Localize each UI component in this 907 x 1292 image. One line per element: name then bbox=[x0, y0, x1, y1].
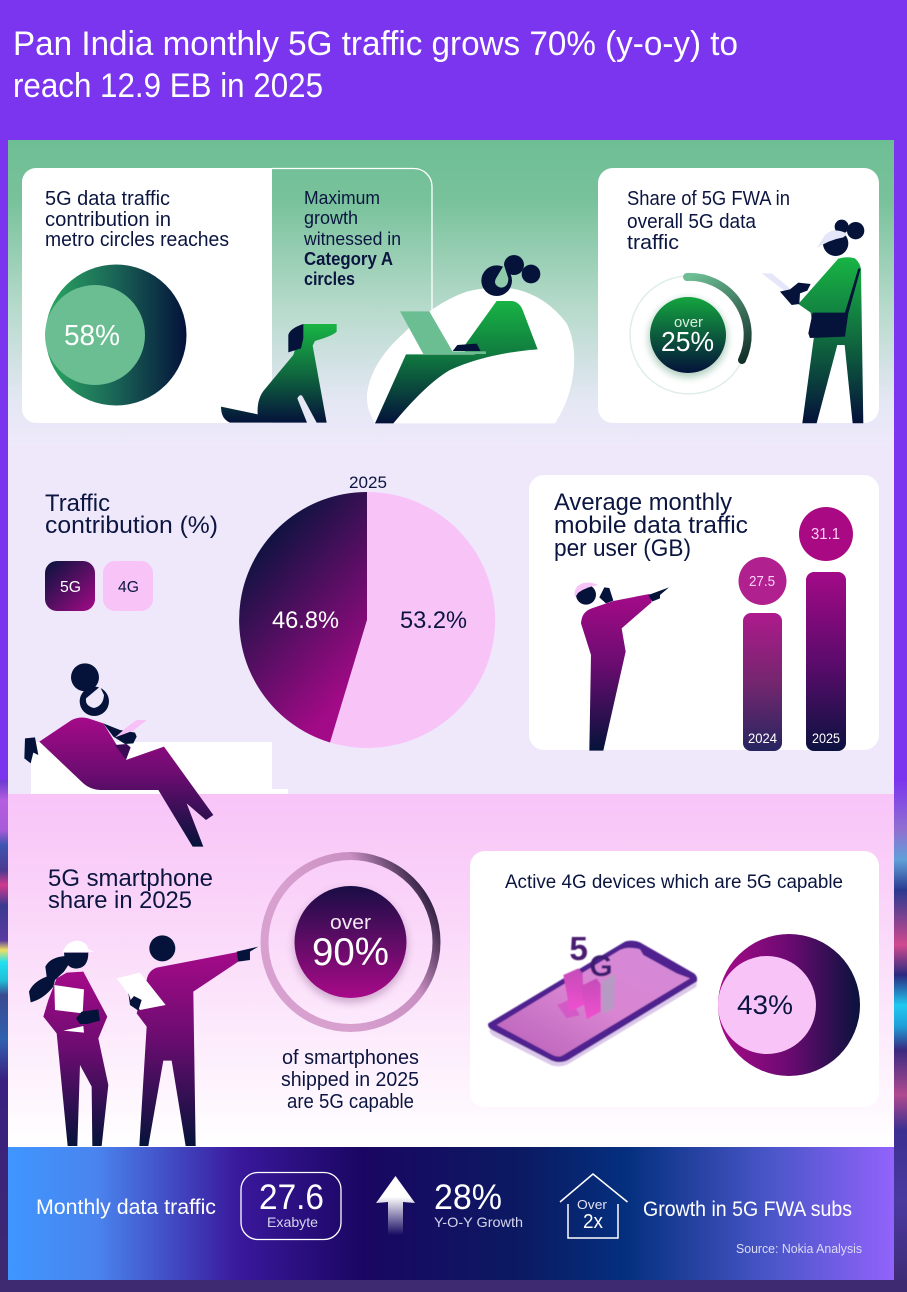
ring gauge: over 90 percent: over bbox=[330, 912, 371, 934]
illustration: man pointing bbox=[575, 583, 669, 751]
monthly data heading: per user (GB) bbox=[554, 535, 691, 562]
heading: 5G smartphone share: 5G smartphone bbox=[48, 865, 213, 892]
FWA heading bbox=[627, 188, 790, 254]
bar chart: GB per user: 2024 bbox=[748, 730, 777, 746]
donut 43 percent: 43% bbox=[737, 990, 793, 1020]
metro heading bbox=[45, 188, 229, 251]
category A note: witnessed in bbox=[303, 228, 401, 249]
illustration: person on bean bag with laptop bbox=[367, 255, 574, 423]
growth stat bbox=[434, 1178, 523, 1230]
card outline bbox=[272, 168, 432, 312]
illustration: dog bbox=[221, 324, 337, 423]
right colourful edge bbox=[894, 780, 907, 1292]
category A note bbox=[303, 187, 401, 289]
illustration: woman with tablet bbox=[762, 220, 864, 423]
source: Source: Nokia Analysis bbox=[736, 1241, 862, 1256]
panel: average monthly data card bbox=[529, 475, 879, 751]
legend: 4G bbox=[103, 561, 153, 611]
FWA heading: Share of 5G FWA in bbox=[627, 188, 790, 210]
ring gauge: over 90 percent bbox=[264, 856, 436, 1028]
pie chart: traffic contribution 2025 bbox=[239, 473, 495, 748]
growth stat: Y-O-Y Growth bbox=[434, 1214, 523, 1230]
category A note: circles bbox=[304, 268, 355, 289]
panel: metro circles card bbox=[22, 168, 432, 423]
donut 58 percent bbox=[45, 264, 186, 406]
growth stat: 28% bbox=[434, 1178, 502, 1217]
category A note: Category A bbox=[304, 248, 393, 269]
panel: pink background bbox=[8, 794, 894, 1147]
bar chart: GB per user: 27.5 bbox=[749, 573, 775, 590]
legend: 5G bbox=[45, 561, 95, 611]
bar chart: GB per user bbox=[738, 507, 853, 751]
man with clipboard bbox=[117, 935, 258, 1146]
panel: active 4G devices card bbox=[470, 851, 879, 1107]
ring gauge 25 percent bbox=[630, 276, 748, 394]
bar chart: GB per user: 2025 bbox=[812, 730, 840, 746]
smartphones caption: are 5G capable bbox=[287, 1091, 414, 1113]
smartphones caption: shipped in 2025 bbox=[281, 1069, 419, 1091]
bottom edge bbox=[0, 1280, 907, 1292]
exabyte box: Exabyte bbox=[267, 1214, 318, 1230]
category A note: growth bbox=[304, 207, 358, 228]
pie chart: traffic contribution 2025: 2025 bbox=[349, 473, 387, 492]
exabyte box bbox=[241, 1172, 341, 1240]
metro heading: 5G data traffic bbox=[45, 188, 170, 210]
pie chart: traffic contribution 2025: 53.2% bbox=[400, 607, 467, 634]
heading: 5G smartphone share bbox=[48, 865, 213, 914]
monthly data heading bbox=[554, 489, 748, 562]
title: reach 12.9 EB in 2025 bbox=[13, 67, 323, 105]
legend: 4G: 4G bbox=[118, 579, 139, 596]
panel: 5G FWA share card bbox=[598, 168, 879, 423]
pie chart: traffic contribution 2025: 46.8% bbox=[272, 607, 339, 634]
illustration: sofa bbox=[31, 742, 288, 794]
title bbox=[13, 25, 738, 105]
metro heading: contribution in bbox=[45, 209, 171, 231]
icon: house with 2x: 2x bbox=[583, 1211, 603, 1233]
card white part bbox=[22, 168, 272, 423]
icon: up arrow bbox=[376, 1176, 415, 1235]
ring gauge 25 percent: 25% bbox=[661, 326, 714, 357]
monthly data traffic label: Monthly data traffic bbox=[36, 1196, 216, 1219]
bar chart: GB per user: 31.1 bbox=[811, 526, 840, 543]
donut 43 percent bbox=[718, 934, 860, 1076]
monthly data heading: mobile data traffic bbox=[554, 512, 748, 539]
ring gauge: over 90 percent: 90% bbox=[312, 931, 389, 974]
icon: house with 2x: Over bbox=[577, 1197, 608, 1212]
illustration: reclining woman with phone bbox=[24, 663, 213, 847]
icon: house with 2x bbox=[560, 1174, 628, 1238]
ring gauge 25 percent: over bbox=[674, 314, 703, 331]
left colourful edge bbox=[0, 780, 8, 1292]
FWA subs label: Growth in 5G FWA subs bbox=[643, 1198, 852, 1221]
smartphones caption: of smartphones bbox=[282, 1047, 419, 1069]
category A note: Maximum bbox=[304, 187, 380, 208]
title: Pan India monthly 5G traffic grows 70% (y-o-y) to bbox=[13, 25, 738, 63]
FWA heading: overall 5G data bbox=[627, 211, 757, 233]
icon: phone with 5G city: G bbox=[589, 950, 613, 983]
icon: phone with 5G city: 5 bbox=[569, 931, 588, 968]
illustration: two people with papers bbox=[29, 935, 258, 1146]
panel: lavender background bbox=[8, 445, 894, 795]
donut 58 percent: 58% bbox=[64, 320, 120, 352]
panel: green to lavender background bbox=[8, 140, 894, 445]
smartphones caption bbox=[281, 1047, 419, 1113]
icon: phone with 5G city bbox=[488, 931, 697, 1066]
exabyte box: 27.6 bbox=[259, 1178, 324, 1217]
active devices heading: Active 4G devices which are 5G capable bbox=[505, 872, 843, 893]
FWA heading: traffic bbox=[627, 232, 679, 254]
monthly data heading: Average monthly bbox=[554, 489, 732, 516]
woman with ponytail bbox=[29, 941, 108, 1146]
heading: traffic contribution bbox=[45, 490, 218, 539]
metro heading: metro circles reaches bbox=[45, 229, 229, 251]
heading: traffic contribution: Traffic bbox=[45, 490, 110, 517]
footer band bbox=[8, 1147, 894, 1280]
heading: traffic contribution: contribution (%) bbox=[45, 512, 218, 539]
heading: 5G smartphone share: share in 2025 bbox=[48, 887, 192, 914]
legend: 5G: 5G bbox=[60, 579, 81, 596]
